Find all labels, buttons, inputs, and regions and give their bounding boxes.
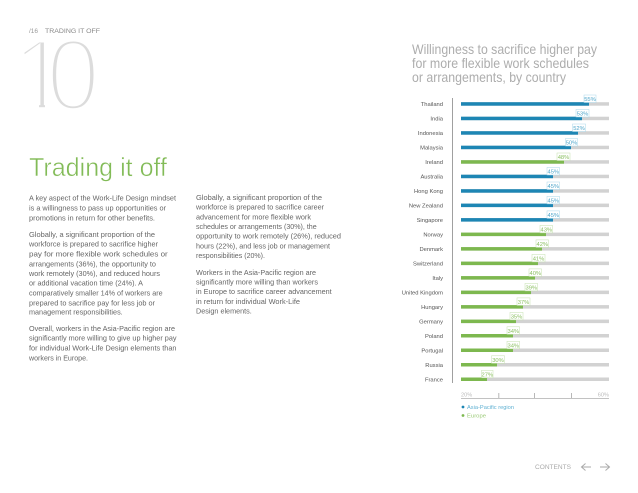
text block: left column: comparatively smaller 14% of workers are <box>29 288 163 298</box>
x axis <box>461 392 609 399</box>
row: Norway: 43% <box>540 227 552 233</box>
text block: right column: responsibilities (20%). <box>196 251 265 260</box>
row: Hong Kong: Hong Kong <box>414 189 443 195</box>
row: Italy: 40% <box>529 271 541 277</box>
row: Russia: Russia <box>425 363 444 369</box>
row: Norway: Norway <box>423 232 443 238</box>
row: Singapore: 45% <box>547 213 559 219</box>
row: Poland: 34% <box>507 329 519 335</box>
legend <box>462 405 514 420</box>
text block: left column: or additional vacation time (24%). A <box>29 278 143 288</box>
text block: left column: Globally, a significant proportion of the <box>29 230 155 239</box>
text block: left column: Overall, workers in the Asia-Pacific region are <box>29 324 175 333</box>
text block: right column: hours (22%), and less job or management <box>196 242 330 250</box>
row: Russia: 30% <box>492 358 504 364</box>
row: Germany: Germany <box>419 319 443 325</box>
text block: right column: schedules or arrangements (30%), the <box>196 222 317 231</box>
title: Trading it off <box>29 152 168 182</box>
row: Switzerland: Switzerland <box>413 261 443 267</box>
text block: left column: pay for more flexible work schedules or <box>29 250 168 258</box>
text block: left column: for individual Work-Life Design elements than <box>29 344 176 352</box>
row: Australia: Australia <box>420 174 444 180</box>
row: Poland <box>425 327 609 340</box>
row: India: 53% <box>577 112 588 118</box>
row: Hungary: 37% <box>518 300 529 306</box>
row: Italy <box>432 269 609 282</box>
big section number: 0 <box>46 17 100 132</box>
text block: right column: significantly more willing than workers <box>196 278 318 286</box>
row: Indonesia: Indonesia <box>418 131 444 137</box>
row: Indonesia <box>418 124 609 137</box>
row: Denmark: 42% <box>536 242 548 248</box>
big section number <box>8 17 100 132</box>
row: Portugal <box>421 341 609 354</box>
legend: Europe <box>467 414 486 420</box>
chart title: or arrangements, by country <box>412 70 566 85</box>
contents navigation <box>535 464 610 471</box>
text block: right column: Workers in the Asia-Pacific region are <box>196 268 316 277</box>
row: New Zealand: 45% <box>547 198 559 204</box>
row: United Kingdom <box>402 283 609 296</box>
chart title: for more flexible work schedules <box>412 56 589 71</box>
row: New Zealand <box>409 196 609 209</box>
text block: right column: advancement for more flexible work <box>196 212 311 222</box>
row: Hungary: Hungary <box>421 305 443 311</box>
bar chart <box>402 95 609 383</box>
row: Ireland: 48% <box>558 155 569 161</box>
text block: left column: management responsibilities. <box>29 308 123 316</box>
row: Ireland: Ireland <box>425 160 443 166</box>
text block: left column: prepared to sacrifice pay for less job or <box>29 298 156 308</box>
row: Malaysia: Malaysia <box>420 146 444 152</box>
row: Malaysia <box>420 138 609 152</box>
page header: TRADING IT OFF <box>45 28 100 35</box>
page header: /16 <box>29 28 38 35</box>
row: Portugal: 34% <box>507 343 519 349</box>
row: Switzerland <box>413 254 609 267</box>
text block: right column: Design elements. <box>196 306 252 316</box>
row: Norway <box>423 225 609 238</box>
text block: right column: Globally, a significant proportion of the <box>196 193 322 202</box>
row: Hong Kong: 45% <box>547 184 559 190</box>
row: France <box>425 370 609 383</box>
text block: left column: arrangements (36%), the opportunity to <box>29 260 156 268</box>
x axis: 20% <box>461 392 472 398</box>
text block: left column: workforce is prepared to sacrifice higher <box>28 240 159 248</box>
text block: right column: workforce is prepared to sacrifice career <box>195 202 325 212</box>
chart title: Willingness to sacrifice higher pay <box>412 42 597 57</box>
row: Portugal: Portugal <box>421 348 443 354</box>
row: United Kingdom: 39% <box>525 285 537 291</box>
text block: left column: A key aspect of the Work-Life Design mindset <box>29 194 176 202</box>
row: Thailand: Thailand <box>421 102 443 108</box>
row: Germany: 35% <box>511 314 522 320</box>
row: Denmark: Denmark <box>419 247 443 253</box>
row: Italy: Italy <box>432 276 443 282</box>
row: Malaysia: 50% <box>566 140 577 146</box>
text block: left column: is a willingness to pass up opportunities or <box>29 204 167 212</box>
text block: left column: workers in Europe. <box>28 354 88 362</box>
row: Australia: 45% <box>547 170 559 176</box>
text block: right column: in Europe to sacrifice career advancement <box>196 287 332 296</box>
row: Indonesia: 52% <box>573 126 585 132</box>
text block: left column: significantly more willing to give up higher pay <box>29 334 177 342</box>
text block: right column: opportunity to work remotely (26%), reduced <box>196 232 341 240</box>
row: Australia <box>420 168 609 180</box>
row: Singapore: Singapore <box>417 218 443 224</box>
text block: left column: work remotely (30%), and reduced hours <box>28 269 160 278</box>
row: India: India <box>430 116 444 122</box>
row: Singapore <box>417 211 609 224</box>
row: France: France <box>425 377 443 383</box>
row: Hong Kong <box>414 182 609 195</box>
row: Thailand <box>421 95 609 108</box>
legend: Asia-Pacific region <box>467 405 514 411</box>
big section number: 1 <box>12 18 69 132</box>
text block: left column: promotions in return for other benefits. <box>29 214 155 222</box>
row: Switzerland: 41% <box>533 256 544 262</box>
row: Thailand: 55% <box>584 97 596 103</box>
text block: right column <box>195 193 341 316</box>
row: United Kingdom: United Kingdom <box>402 290 443 296</box>
row: Hungary <box>421 298 609 311</box>
text block: left column <box>28 194 177 362</box>
row: Poland: Poland <box>425 334 443 340</box>
row: Russia <box>425 356 609 369</box>
text block: right column: in return for individual Work-Life <box>196 297 300 306</box>
contents navigation: CONTENTS <box>535 464 572 471</box>
row: France: 27% <box>481 372 493 378</box>
chart title <box>412 42 597 85</box>
row: New Zealand: New Zealand <box>409 203 443 209</box>
row: Denmark <box>419 240 609 253</box>
row: Germany <box>419 312 609 325</box>
row: India <box>430 110 609 122</box>
row: Ireland <box>425 153 609 166</box>
x axis: 60% <box>598 392 609 398</box>
